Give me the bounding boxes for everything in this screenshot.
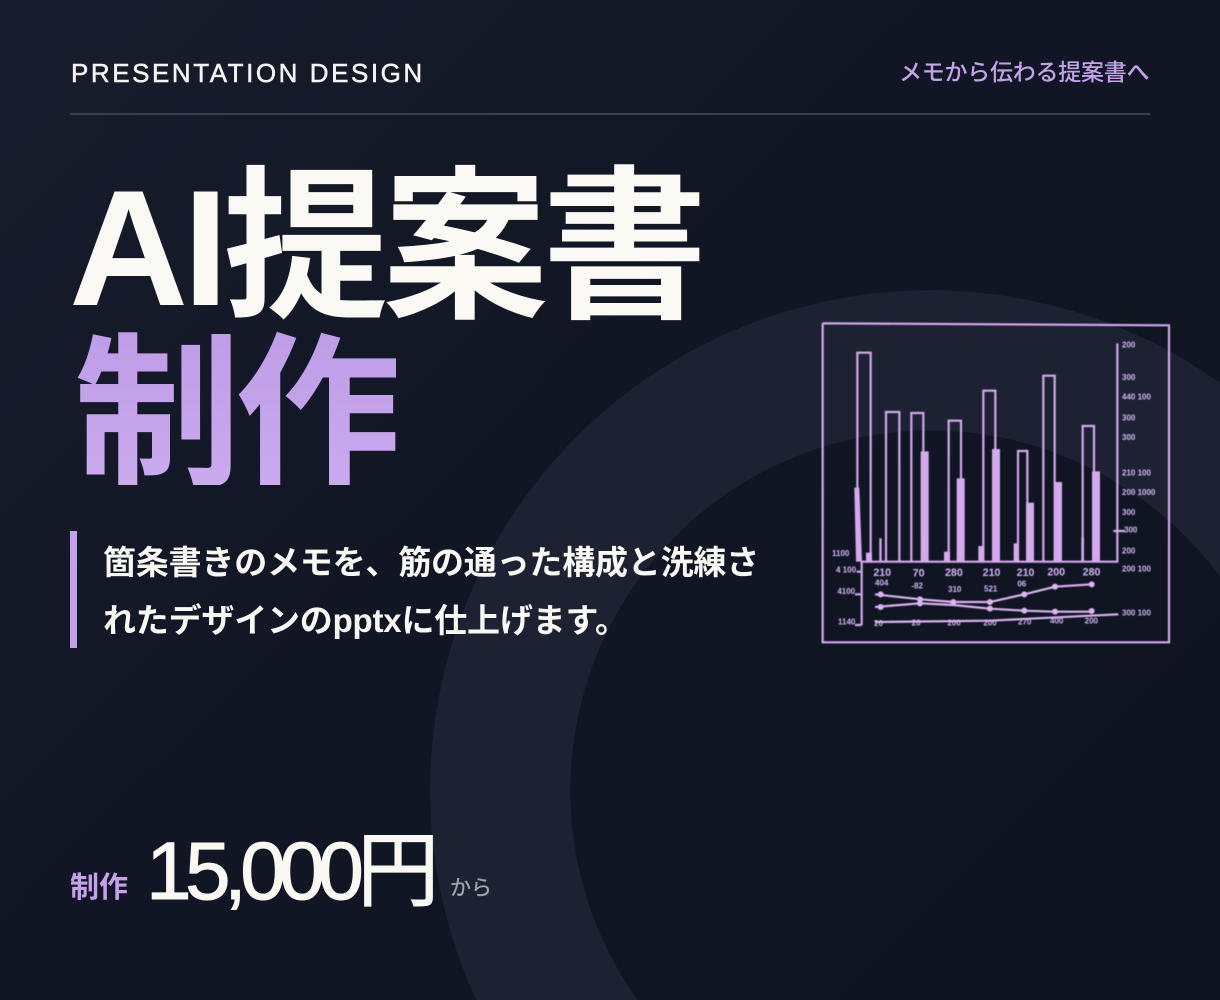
chart labels: 280 [1083,566,1101,578]
chart axes [855,343,1125,625]
chart labels: 404 [875,578,889,587]
title line 1: AI提案書 [69,156,702,340]
chart labels: 200 [983,618,997,627]
accent bar [70,531,77,648]
chart labels: 300 [1122,413,1136,422]
chart labels: 200 [1047,566,1065,578]
chart labels: 200 [1122,546,1136,555]
chart labels: 200 [1122,340,1136,349]
chart labels: 300 [1122,373,1136,382]
chart labels: 200 100 [1122,565,1151,574]
description text [103,544,759,639]
chart labels: 400 [1050,616,1064,625]
chart labels: 300 [1122,508,1136,517]
chart labels: 1140 [838,617,856,626]
chart labels: 1100 [832,549,850,558]
chart labels: 200 [947,618,961,627]
chart labels: 300 100 [1122,609,1151,618]
title line 2: 制作 [74,280,396,522]
chart image [820,322,1171,644]
chart labels: 300 [1124,526,1138,535]
chart labels: 440 100 [1122,392,1151,401]
chart labels: 300 [1122,433,1136,442]
price suffix: から [450,877,492,900]
description text: れたデザインのpptxに仕上げます。 [103,602,628,639]
chart labels: 210 100 [1122,468,1151,477]
chart labels: 20 [874,619,883,628]
tagline: メモから伝わる提案書へ [899,53,1149,87]
price amount: 15,000円 [146,826,433,917]
eyebrow label: PRESENTATION DESIGN [71,58,425,88]
chart labels: 20 [912,618,921,627]
description text: 箇条書きのメモを、筋の通った構成と洗練さ [103,544,759,581]
chart labels: 521 [984,584,998,593]
chart labels: 210 [873,567,891,579]
chart labels: 06 [1017,580,1027,589]
chart labels: 4 100 [836,565,857,574]
chart labels: 210 [983,567,1001,579]
chart frame [823,323,1170,642]
outline bars [857,353,1094,562]
chart labels: 200 [1085,616,1099,625]
chart labels: 200 1000 [1122,488,1156,497]
chart labels: 280 [945,567,963,579]
title line 2 [74,318,396,485]
chart labels: -82 [911,582,923,591]
chart labels: 4100 [837,587,856,596]
price block [70,826,492,917]
price prefix: 制作 [70,872,128,904]
header divider [70,113,1150,115]
chart labels: 310 [948,585,962,594]
chart labels: 270 [1018,618,1032,627]
description callout [70,531,759,648]
chart labels: 210 [1017,567,1035,579]
filled bars [854,449,1100,562]
chart labels: 70 [913,568,925,580]
line chart [875,581,1118,622]
chart labels [832,340,1156,628]
